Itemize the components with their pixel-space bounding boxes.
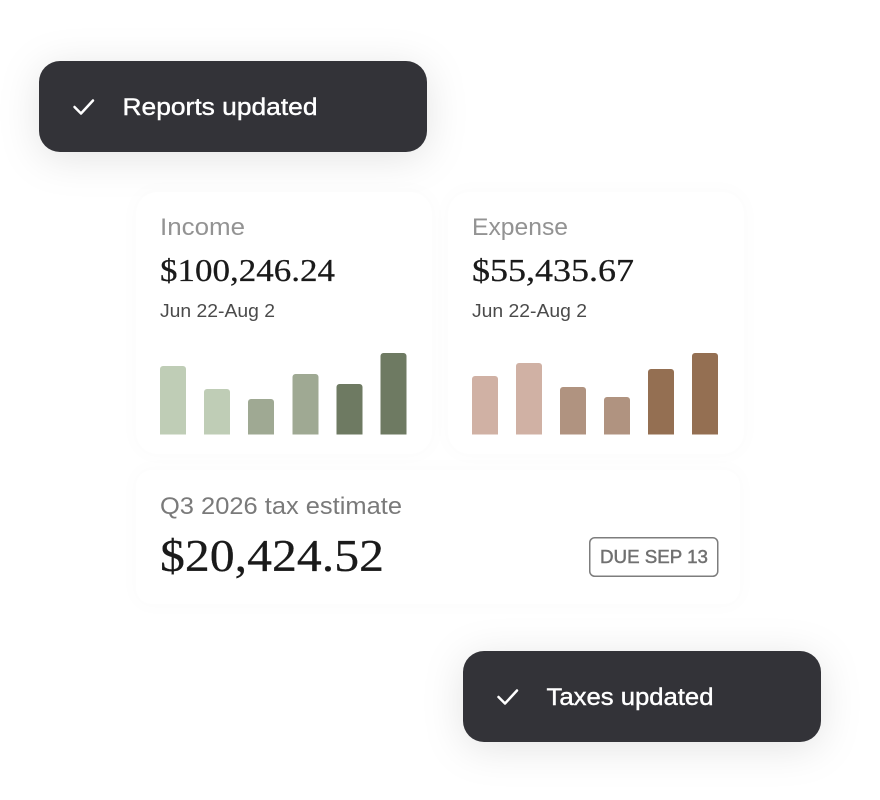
tax estimate label: Q3 2026 tax estimate: [160, 493, 402, 520]
expense label: Expense: [472, 214, 568, 241]
bar chart: income: [160, 353, 406, 434]
toast: reports updated: [39, 61, 427, 152]
badge: due date: [590, 538, 718, 576]
badge: due date: DUE SEP 13: [600, 547, 708, 567]
income amount: $100,246.24: [160, 252, 335, 288]
panel: tax estimate: [136, 470, 740, 604]
toast: taxes updated: [463, 651, 821, 742]
income label: Income: [160, 214, 245, 241]
bar chart: expense: [472, 353, 718, 434]
panel: income: [136, 192, 432, 454]
icon: taxes check mark: [498, 690, 517, 704]
expense amount: $55,435.67: [472, 252, 634, 288]
toast text: reports updated: Reports updated: [122, 94, 318, 121]
expense date range: Jun 22-Aug 2: [472, 301, 587, 321]
income date range: Jun 22-Aug 2: [160, 301, 275, 321]
toast text: taxes updated: Taxes updated: [546, 684, 714, 711]
icon: reports check mark: [74, 100, 93, 114]
tax estimate amount: $20,424.52: [160, 531, 384, 581]
panel: expense: [448, 192, 744, 454]
